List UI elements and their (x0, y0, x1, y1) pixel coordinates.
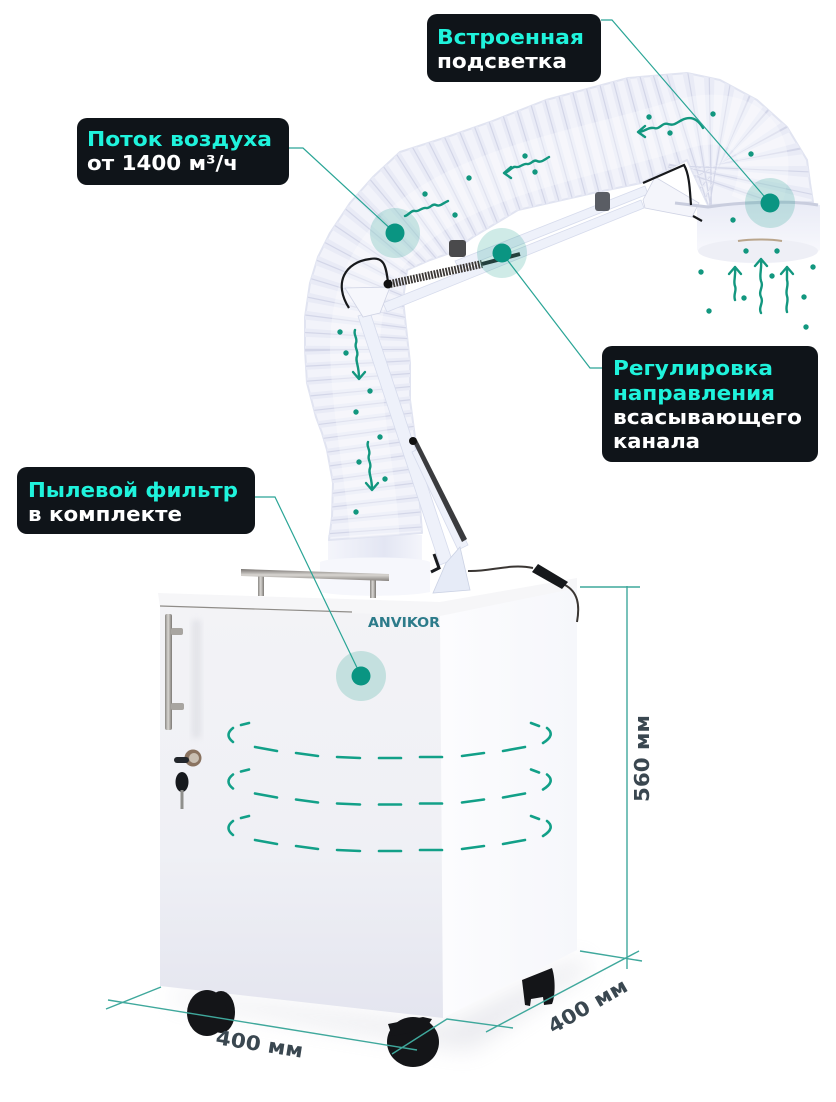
arm knob upper (595, 192, 610, 211)
ring 1 (228, 723, 551, 758)
gas strut (413, 440, 467, 542)
callout: airflow: Поток воздуха (87, 127, 272, 151)
elbow joint (345, 287, 390, 317)
callout: direction adjustment: Регулировка (613, 356, 773, 380)
callout: dust filter: Пылевой фильтр (28, 478, 238, 502)
callout: direction adjustment: канала (613, 429, 700, 453)
arrow: duct left (405, 201, 448, 216)
arrow: intake center (755, 259, 767, 313)
ring 3 (228, 816, 551, 851)
spring end rod (482, 254, 520, 264)
bracket clip (431, 554, 439, 572)
top carry handle (241, 569, 389, 598)
callout: direction adjustment (602, 346, 818, 462)
dimension lines (106, 586, 642, 1054)
callout: direction adjustment: направления (613, 381, 775, 405)
power cable and switch (468, 564, 578, 622)
hotspot: filter (336, 651, 386, 701)
callout: dust filter (17, 467, 255, 534)
callout: built-in lighting: подсветка (437, 49, 567, 73)
strut pivot (409, 437, 417, 445)
cabinet front door (160, 606, 443, 1018)
lower arm bars (358, 312, 452, 565)
cabinet (158, 578, 577, 1018)
callout: direction adjustment: всасывающего (613, 405, 802, 429)
callout: built-in lighting (427, 14, 601, 82)
black cables (342, 165, 702, 308)
arm spring (390, 264, 482, 284)
leader line: lighting (601, 20, 770, 203)
door lock and key (174, 750, 202, 809)
cabinet top panel (158, 578, 577, 616)
duct body (305, 73, 813, 540)
wrist joint (643, 177, 699, 217)
duct outlet hood (697, 201, 820, 264)
arrow: duct downward upper (353, 330, 365, 379)
arm knob near spring (449, 240, 466, 257)
arrow: intake left (729, 267, 741, 300)
airflow rings around cabinet (228, 723, 551, 851)
dimension: height: 560 мм (630, 715, 654, 802)
leader line: filter (255, 497, 361, 676)
hotspot: airflow (370, 208, 420, 258)
door handle shadow (192, 620, 201, 738)
flexible white duct (305, 73, 813, 545)
airflow arrows (353, 118, 793, 490)
leader line: adjustment (502, 253, 602, 368)
caster front right (387, 1017, 439, 1067)
upper arm bars (455, 186, 648, 269)
floor shadow (170, 958, 590, 1050)
arrow: duct top right (638, 118, 703, 137)
callout: dust filter: в комплекте (28, 502, 182, 526)
caster back right (522, 968, 555, 1006)
ring 2 (228, 770, 551, 804)
airflow particles (337, 111, 816, 515)
caster front left (187, 990, 235, 1036)
casters (187, 968, 555, 1067)
door handle (165, 614, 184, 730)
duct ribs (355, 120, 764, 545)
arm base bracket (433, 547, 470, 593)
duct collar (320, 535, 430, 596)
callout: built-in lighting: Встроенная (437, 25, 584, 49)
hotspot: adjustment (477, 228, 527, 278)
spring end knob (384, 280, 392, 288)
articulated lamp arm (342, 165, 818, 593)
leader line: airflow (289, 148, 395, 233)
callout: airflow: от 1400 м³/ч (87, 151, 238, 175)
arrow: intake right (781, 267, 793, 312)
dimension: depth: 400 мм (544, 974, 632, 1038)
door gap line (160, 606, 352, 612)
cabinet side face (440, 588, 577, 1018)
duct clamp band (675, 202, 818, 207)
brand logo: ANVIKOR (368, 616, 440, 631)
callout: airflow (77, 118, 289, 185)
arrow: duct downward lower (366, 442, 378, 490)
arrow: duct top middle (504, 157, 549, 178)
hotspot: lighting (745, 178, 795, 228)
dimension: width: 400 мм (214, 1025, 305, 1063)
